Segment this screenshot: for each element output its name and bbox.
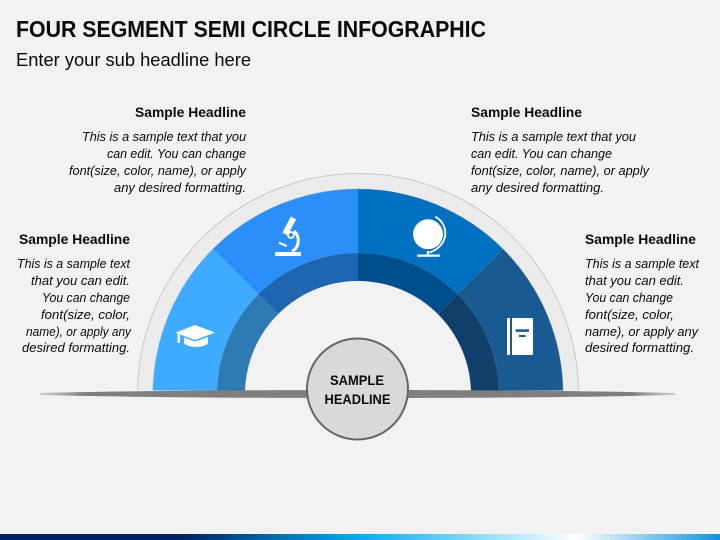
text block: top left: This is a sample text that you	[82, 130, 246, 144]
text block: right: You can change	[585, 291, 673, 305]
footer gradient bar	[0, 534, 720, 540]
segment 3: inner band	[358, 253, 458, 314]
text block: top right: can edit. You can change	[471, 147, 612, 161]
text block: left: desired formatting.	[22, 341, 130, 355]
text block: right: desired formatting.	[585, 341, 694, 355]
center circle: SAMPLE	[330, 372, 384, 388]
outer ring	[138, 174, 578, 394]
text block: right: name), or apply any	[585, 325, 699, 339]
text block: top left: any desired formatting.	[114, 181, 246, 195]
icon: book	[507, 318, 533, 355]
text block: left: font(size, color,	[41, 308, 130, 322]
center circle	[307, 338, 408, 440]
text block: top right	[471, 104, 650, 195]
segment 4: dark blue	[458, 249, 563, 394]
segment 1: light blue	[153, 249, 258, 394]
text block: left: name), or apply any	[26, 325, 132, 339]
segment 1: inner band	[217, 294, 278, 394]
segment 2: blue	[213, 189, 358, 294]
text block: top left: Sample Headline	[135, 104, 246, 120]
text block: top right: font(size, color, name), or apply	[471, 164, 650, 178]
icon: graduation cap	[176, 325, 215, 347]
semicircle chart	[138, 174, 578, 394]
text block: right: that you can edit.	[585, 274, 684, 288]
text block: top right: This is a sample text that you	[471, 130, 636, 144]
segment 4: inner band	[438, 294, 499, 394]
text block: left	[17, 231, 132, 355]
center circle: HEADLINE	[324, 391, 390, 407]
text block: left: This is a sample text	[17, 257, 131, 271]
text block: top left: can edit. You can change	[107, 147, 246, 161]
text block: right: Sample Headline	[585, 231, 696, 247]
text block: right	[585, 231, 700, 355]
text block: top left	[69, 104, 247, 195]
text block: right: font(size, color,	[585, 308, 674, 322]
segment 3: mid blue	[358, 189, 503, 294]
horizontal base bar	[40, 390, 675, 398]
icon: microscope	[275, 218, 301, 254]
text block: left: You can change	[42, 291, 130, 305]
text block: top right: any desired formatting.	[471, 181, 604, 195]
text block: top right: Sample Headline	[471, 104, 582, 120]
text block: right: This is a sample text	[585, 257, 700, 271]
segment 2: inner band	[258, 253, 358, 314]
title: FOUR SEGMENT SEMI CIRCLE INFOGRAPHIC	[16, 16, 486, 42]
subtitle: Enter your sub headline here	[16, 50, 251, 70]
text block: left: Sample Headline	[19, 231, 130, 247]
icon: globe	[413, 217, 445, 257]
text block: left: that you can edit.	[31, 274, 130, 288]
text block: top left: font(size, color, name), or apply	[69, 164, 247, 178]
